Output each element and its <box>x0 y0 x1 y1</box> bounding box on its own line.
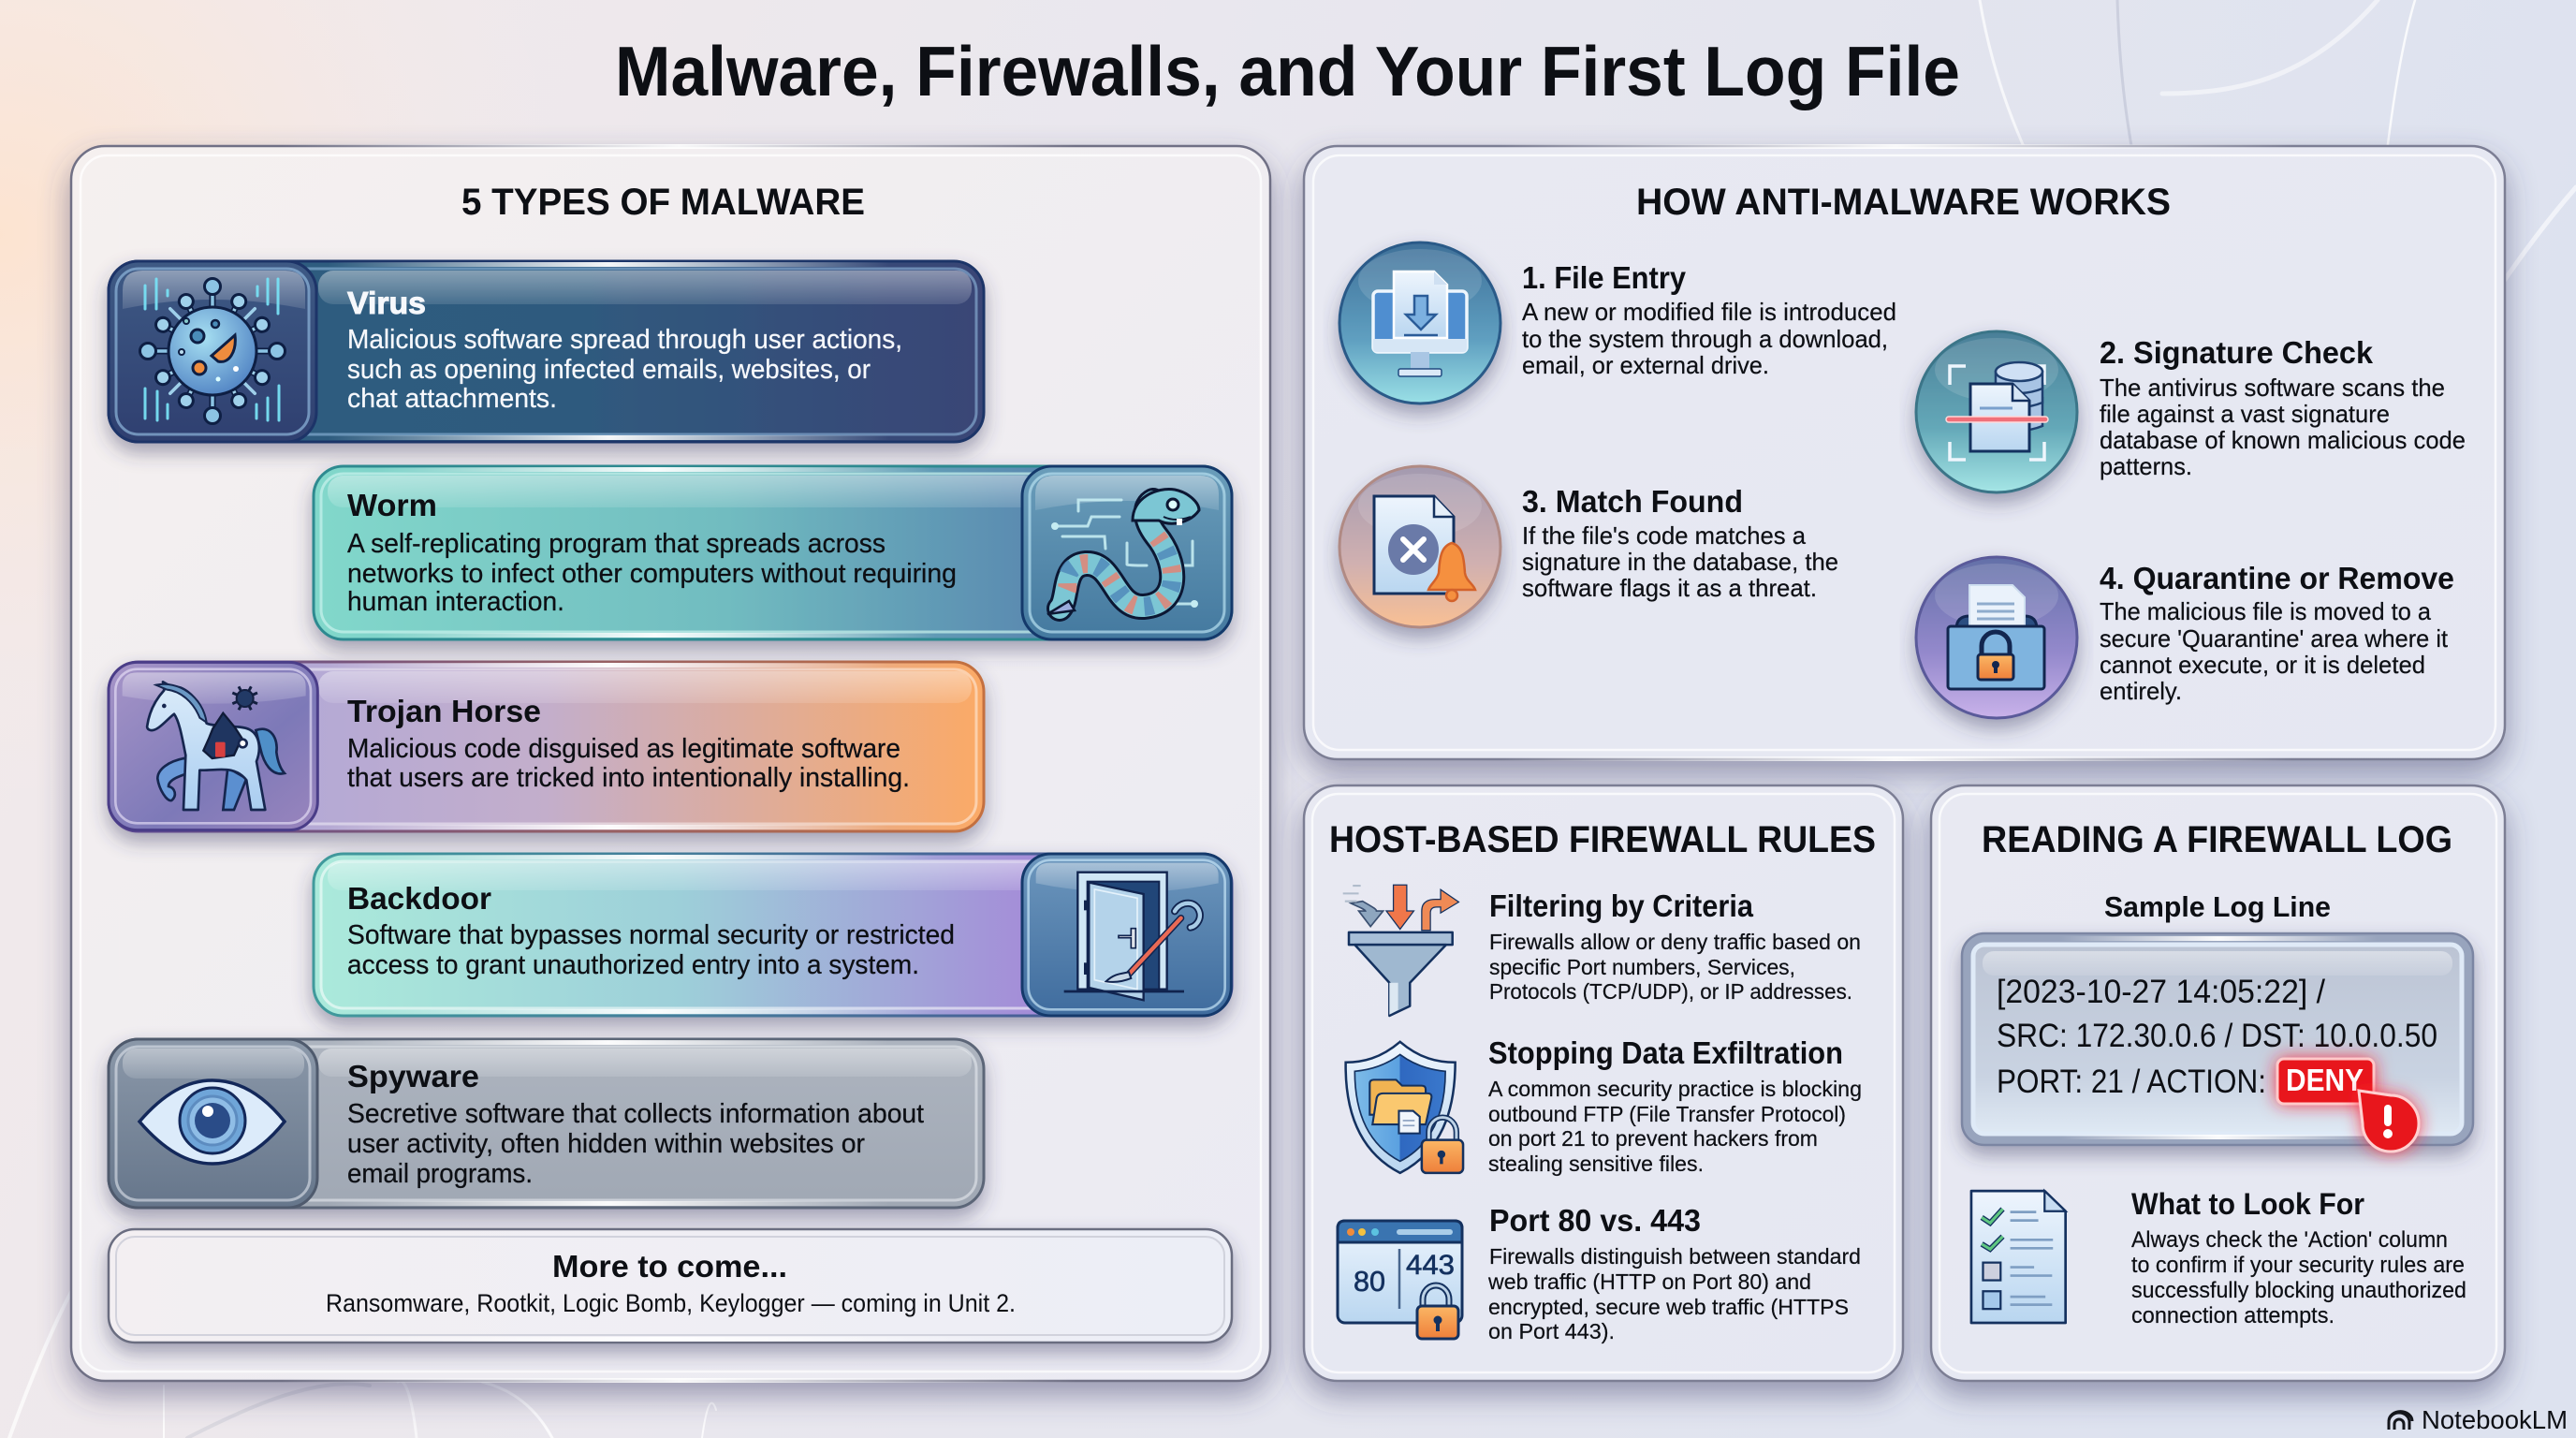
icon: spyware eye <box>109 1039 317 1208</box>
step 2 text: patterns. <box>2100 452 2192 480</box>
panel: 5 types of malware <box>71 144 1270 1383</box>
step 3 title: 3. Match Found <box>1522 484 1743 519</box>
step 1 title: 1. File Entry <box>1522 260 1687 295</box>
card text: worm: networks to infect other computers without requiring <box>347 559 957 589</box>
title: Malware, Firewalls, and Your First Log File <box>615 32 1960 110</box>
card text: trojan: Malicious code disguised as legitimate software <box>347 734 900 764</box>
item text: filtering <box>1489 930 1861 1004</box>
card text: spyware: Secretive software that collects information about <box>347 1099 924 1129</box>
card text: worm: human interaction. <box>347 587 564 617</box>
item title: port 80 vs 443: Port 80 vs. 443 <box>1489 1203 1701 1238</box>
icon: checklist <box>1971 1191 2066 1323</box>
card: spyware <box>109 1039 984 1208</box>
heading: host-based firewall rules: HOST-BASED FIREWALL RULES <box>1329 819 1876 860</box>
panel: reading a firewall log <box>1931 785 2505 1381</box>
step 2 icon: signature check <box>1916 331 2077 492</box>
item text: exfiltration: outbound FTP (File Transfer Protocol) <box>1488 1102 1846 1126</box>
item text: exfiltration: on port 21 to prevent hackers from <box>1488 1126 1818 1151</box>
item title: exfiltration: Stopping Data Exfiltration <box>1488 1035 1843 1070</box>
item text: exfiltration: A common security practice is blocking <box>1488 1077 1862 1101</box>
card title: Virus: Virus <box>347 286 426 320</box>
panel: how anti-malware works <box>1304 144 2505 761</box>
card text: trojan <box>347 734 910 793</box>
card text: backdoor: access to grant unauthorized entry into a system. <box>347 950 919 980</box>
step 2 text: database of known malicious code <box>2100 426 2466 454</box>
step 1 text: email, or external drive. <box>1522 351 1769 379</box>
step 3 icon: match found <box>1339 466 1500 627</box>
deny badge <box>2277 1059 2374 1104</box>
card title: Trojan Horse: Trojan Horse <box>347 694 541 728</box>
step 1 text <box>1522 298 1896 379</box>
card: backdoor <box>314 854 1232 1016</box>
icon: worm <box>1022 466 1232 639</box>
item text: filtering: specific Port numbers, Services, <box>1489 955 1795 979</box>
item text: exfiltration <box>1488 1077 1862 1176</box>
item title: what to look for: What to Look For <box>2131 1187 2364 1221</box>
card text: spyware <box>347 1099 924 1189</box>
item text: port 80 vs 443: encrypted, secure web traffic (HTTPS <box>1488 1295 1849 1319</box>
step 2 text: file against a vast signature <box>2100 400 2390 428</box>
card: trojan horse <box>109 662 984 831</box>
step 3 text <box>1522 521 1838 602</box>
item text: what to look for <box>2131 1227 2466 1328</box>
item text: port 80 vs 443: Firewalls distinguish between standard <box>1489 1244 1861 1269</box>
log text: SRC: 172.30.0.6 / DST: 10.0.0.50 <box>1997 1018 2437 1054</box>
logo: NotebookLM: NotebookLM <box>2422 1405 2568 1434</box>
step 2 text <box>2100 374 2466 480</box>
step 4 icon: quarantine <box>1916 557 2077 718</box>
callout title: More to come... <box>552 1249 787 1284</box>
log text <box>1997 974 2437 1100</box>
card text: virus: Malicious software spread through user actions, <box>347 325 902 355</box>
item text: exfiltration: stealing sensitive files. <box>1488 1152 1704 1176</box>
card title: Worm: Worm <box>347 488 437 522</box>
card text: worm: A self-replicating program that spreads across <box>347 529 886 559</box>
subheading: sample log line: Sample Log Line <box>2104 890 2331 923</box>
icon: funnel <box>1343 885 1458 1016</box>
icon: port 80 vs 443 browser <box>1338 1221 1462 1339</box>
item text: what to look for: connection attempts. <box>2131 1303 2334 1328</box>
step 2 title: 2. Signature Check <box>2100 335 2374 370</box>
step 4 text <box>2100 597 2449 705</box>
card: virus <box>109 261 984 442</box>
card title: Spyware: Spyware <box>347 1059 479 1093</box>
callout: more to come <box>109 1229 1232 1343</box>
step 4 title: 4. Quarantine or Remove <box>2100 561 2454 595</box>
log box <box>1962 933 2473 1152</box>
card text: backdoor: Software that bypasses normal security or restricted <box>347 920 955 950</box>
step 4 text: The malicious file is moved to a <box>2100 597 2432 625</box>
icon: port 80 vs 443 browser: 80 <box>1354 1265 1385 1298</box>
heading: reading a firewall log: READING A FIREWALL LOG <box>1982 819 2452 860</box>
step 1 text: to the system through a download, <box>1522 325 1888 353</box>
item text: what to look for: to confirm if your security rules are <box>2131 1253 2465 1278</box>
step 3 text: If the file's code matches a <box>1522 521 1807 550</box>
log text: PORT: 21 / ACTION: <box>1997 1064 2266 1100</box>
item text: port 80 vs 443: web traffic (HTTP on Port 80) and <box>1487 1269 1811 1294</box>
icon: alert pin <box>2359 1091 2419 1152</box>
item text: filtering: Firewalls allow or deny traffic based on <box>1489 930 1861 954</box>
card text: worm <box>347 529 957 617</box>
item text: what to look for: successfully blocking unauthorized <box>2131 1278 2466 1303</box>
icon: backdoor <box>1022 854 1231 1016</box>
card text: trojan: that users are tricked into intentionally installing. <box>347 763 910 793</box>
card text: virus <box>347 325 902 414</box>
card text: spyware: email programs. <box>347 1159 533 1189</box>
icon: port 80 vs 443 browser: 443 <box>1406 1250 1455 1281</box>
card text: virus: such as opening infected emails, websites, or <box>347 355 871 385</box>
step 4 text: cannot execute, or it is deleted <box>2100 651 2425 679</box>
step 1 icon: file entry <box>1339 242 1500 404</box>
card title: Backdoor: Backdoor <box>347 881 491 916</box>
card text: backdoor <box>347 920 955 980</box>
item title: filtering: Filtering by Criteria <box>1489 888 1754 923</box>
item text: what to look for: Always check the 'Action' column <box>2131 1227 2448 1253</box>
step 3 text: software flags it as a threat. <box>1522 574 1817 602</box>
icon: shield with folder <box>1346 1042 1463 1173</box>
icon: trojan horse <box>109 662 317 830</box>
card text: spyware: user activity, often hidden within websites or <box>347 1129 865 1159</box>
step 3 text: signature in the database, the <box>1522 548 1838 576</box>
heading: 5 types: 5 TYPES OF MALWARE <box>461 182 865 223</box>
step 2 text: The antivirus software scans the <box>2100 374 2445 402</box>
log text: [2023-10-27 14:05:22] / <box>1997 974 2325 1010</box>
step 4 text: entirely. <box>2100 677 2182 705</box>
step 1 text: A new or modified file is introduced <box>1522 298 1896 326</box>
item text: port 80 vs 443 <box>1487 1244 1861 1343</box>
card: worm <box>314 466 1232 639</box>
item text: port 80 vs 443: on Port 443). <box>1488 1319 1615 1343</box>
heading: how anti-malware works: HOW ANTI-MALWARE WORKS <box>1636 182 2171 223</box>
card text: virus: chat attachments. <box>347 384 557 414</box>
step 4 text: secure 'Quarantine' area where it <box>2100 624 2449 653</box>
panel: host-based firewall rules <box>1304 785 1903 1381</box>
icon: virus <box>109 261 316 442</box>
deny badge: DENY <box>2286 1063 2364 1097</box>
callout text: Ransomware, Rootkit, Logic Bomb, Keylogger — coming in Unit 2. <box>326 1289 1016 1317</box>
item text: filtering: Protocols (TCP/UDP), or IP addresses. <box>1489 979 1852 1004</box>
